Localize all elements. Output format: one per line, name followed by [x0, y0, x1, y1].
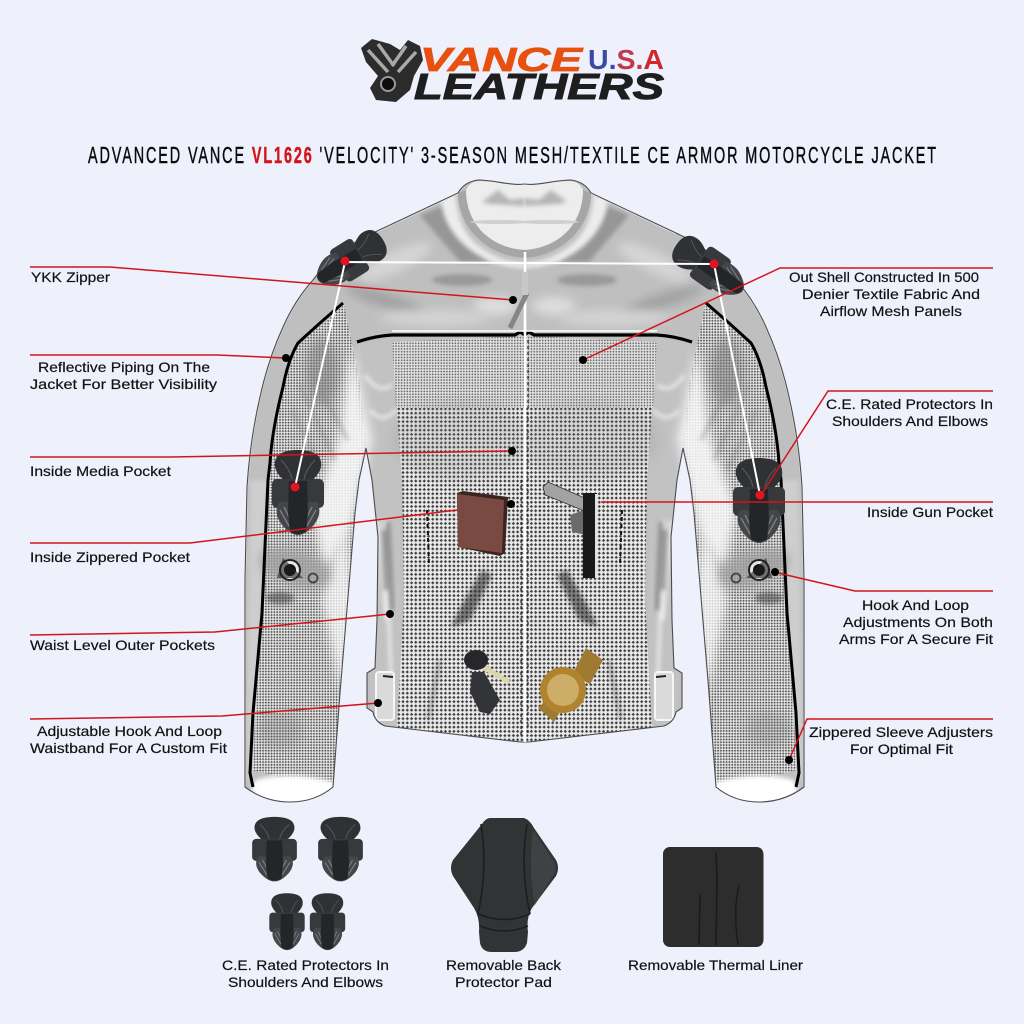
wristwatch: [538, 648, 603, 722]
caption: thermal liner: Removable Thermal Liner: [628, 957, 803, 973]
callout: Inside Media Pocket: [30, 447, 516, 479]
jacket right half: [519, 180, 804, 810]
callout: Out Shell: [579, 268, 993, 364]
callout: Adjustable Waistband: [30, 699, 382, 756]
callout: Waist Level Outer Pockets: [30, 610, 394, 653]
protector top right: [318, 817, 363, 881]
callout: Reflective Piping: [30, 354, 290, 392]
caption: CE protectors: C.E. Rated Protectors In: [222, 957, 389, 973]
handgun: [543, 482, 597, 578]
protector bottom left: [269, 893, 305, 950]
elbow protector left: [272, 450, 324, 535]
callout: Hook And Loop Arms: Arms For A Secure Fit: [839, 631, 993, 647]
callout: Hook And Loop Arms: Hook And Loop: [862, 597, 969, 613]
callout: Out Shell: Denier Textile Fabric And: [802, 286, 980, 302]
icon: engine: [361, 39, 423, 102]
accessory: CE protectors: [252, 817, 363, 950]
logo text: USA: U.S.A: [588, 44, 664, 75]
wallet: [457, 491, 508, 556]
callout: Zippered Sleeve Adjusters: For Optimal Fit: [850, 741, 953, 757]
callout: Hook And Loop Arms: Adjustments On Both: [843, 614, 993, 630]
callout: Inside Zippered Pocket: Inside Zippered Pocket: [30, 549, 190, 565]
caption: back protector pad: Protector Pad: [455, 974, 552, 990]
white connector lines: [295, 262, 760, 495]
callout: Inside Media Pocket: Inside Media Pocket: [30, 463, 171, 479]
accessory: thermal liner: [663, 847, 764, 947]
caption: CE protectors: Shoulders And Elbows: [228, 974, 383, 990]
logo text: Vance: VANCE: [420, 41, 583, 78]
callout: Reflective Piping: Reflective Piping On The: [38, 359, 210, 375]
accessory: back protector pad: [451, 818, 558, 952]
callout: Zippered Sleeve Adjusters: Zippered Sleeve Adjusters: [809, 724, 993, 740]
callout: Hook And Loop Arms: [771, 568, 993, 647]
car key: [464, 650, 510, 714]
protector top left: [252, 817, 297, 881]
shoulder protector right: [666, 229, 753, 306]
logo text: Leathers: LEATHERS: [414, 66, 664, 107]
callout: Adjustable Waistband: Waistband For A Custom Fit: [30, 740, 227, 756]
caption: back protector pad: [446, 957, 562, 990]
callout: Inside Gun Pocket: Inside Gun Pocket: [867, 504, 993, 520]
callout: Inside Zippered Pocket: [30, 500, 515, 565]
protector bottom right: [310, 893, 345, 950]
callout: Reflective Piping: Jacket For Better Visibility: [30, 376, 217, 392]
jacket: [245, 180, 804, 810]
callout: Waist Level Outer Pockets: Waist Level Outer Pockets: [30, 637, 215, 653]
callout: YKK Zipper: YKK Zipper: [31, 269, 110, 285]
callout: Zippered Sleeve Adjusters: [785, 719, 993, 764]
red marker dots: [290, 256, 764, 500]
center zipper: [510, 252, 528, 742]
elbow protector right: [733, 458, 785, 543]
caption: back protector pad: Removable Back: [446, 957, 562, 973]
caption: CE protectors: [222, 957, 389, 990]
shoulder protector left: [308, 224, 393, 296]
logo: [361, 39, 664, 107]
callout: CE Protectors: Shoulders And Elbows: [832, 413, 988, 429]
callout: CE Protectors: [761, 391, 993, 495]
callout: Out Shell: Airflow Mesh Panels: [820, 303, 962, 319]
callout: Adjustable Waistband: Adjustable Hook And Loop: [37, 723, 222, 739]
jacket left half: [245, 180, 530, 810]
callout: CE Protectors: C.E. Rated Protectors In: [826, 396, 993, 412]
callout: YKK Zipper: [30, 267, 517, 304]
callout: Out Shell: Out Shell Constructed In 500: [789, 269, 979, 285]
